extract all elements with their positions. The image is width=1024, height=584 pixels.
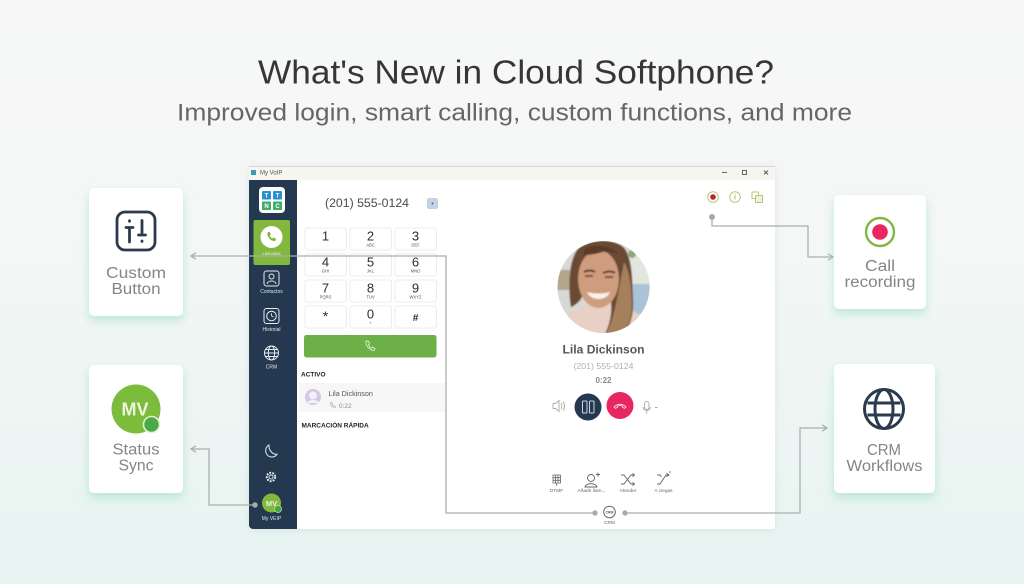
icon: moon: [266, 445, 277, 457]
CRM tab: [604, 506, 615, 526]
icon: globe: [864, 390, 904, 428]
caller photo: [557, 240, 651, 334]
dial pad: 3: [412, 228, 419, 244]
dial pad: #: [413, 313, 419, 324]
dial pad: 4: [322, 254, 329, 270]
label line 2: Sync: [118, 458, 154, 474]
panel: softphone app window: [249, 166, 775, 529]
active call row: [299, 383, 445, 412]
label: Call: [865, 258, 895, 275]
nav: contacts: Contactos: [260, 289, 283, 295]
label: Status: [112, 442, 160, 458]
nav: CRM: [264, 346, 278, 370]
label: Custom: [106, 265, 166, 282]
nav: history: Historial: [262, 327, 281, 333]
dial pad: 2: [367, 228, 374, 244]
nav: history: [262, 308, 281, 333]
panel: call recording: [834, 195, 926, 309]
phone number display: (201) 555-0124: [325, 198, 410, 210]
logo: N: [264, 204, 269, 210]
label line 2: Button: [112, 281, 160, 298]
dial pad: 1: [322, 228, 329, 244]
dial pad: GHI: [322, 268, 329, 274]
call controls: [553, 392, 658, 420]
dial pad: 9: [412, 280, 419, 296]
caller details: [562, 342, 644, 385]
arrow: record icon to call recording: [709, 214, 833, 257]
label: CRM: [867, 442, 901, 459]
tool: DTMF: DTMF: [550, 488, 563, 494]
in-call tools: [550, 471, 673, 494]
my account avatar: MV: [266, 499, 277, 508]
dial pad: JKL: [367, 268, 375, 274]
tool: attended transfer: Atender: [620, 488, 637, 494]
icon: settings gear: [267, 473, 275, 481]
tool: add call: Añadir llam...: [578, 488, 606, 494]
CRM tab: CRM: [606, 510, 614, 514]
dial pad: +: [369, 320, 372, 326]
arrow: dial pad to custom button: [191, 256, 598, 516]
dial pad: 7: [322, 280, 329, 296]
arrow: account to status sync: [191, 449, 258, 508]
logo: C: [275, 204, 280, 210]
dial pad: WXYZ: [409, 294, 422, 300]
caller details: Lila Dickinson: [562, 342, 644, 356]
logo: [259, 187, 285, 213]
logo: T: [265, 194, 269, 200]
dial pad: 0: [367, 306, 374, 322]
dial pad: 6: [412, 254, 419, 270]
tool: blind transfer: A ciegas: [654, 488, 673, 494]
title: What's New in Cloud Softphone?: [258, 54, 774, 90]
subtitle: Improved login, smart calling, custom functions, and more: [177, 100, 852, 126]
dial pad: TUV: [366, 294, 375, 300]
panel: status sync: [89, 365, 183, 493]
dial pad: ABC: [366, 242, 375, 248]
nav: calls active: Llamadas: [262, 251, 281, 256]
dial pad: [305, 228, 436, 328]
speed dial heading: MARCACIÓN RÁPIDA: [302, 420, 369, 430]
caller details: 0:22: [595, 376, 612, 385]
active call row: Lila Dickinson: [328, 389, 373, 398]
icon: record: [866, 218, 894, 246]
dial pad: 8: [367, 280, 374, 296]
call button: [304, 335, 436, 358]
nav: calls active: [254, 220, 290, 265]
my account avatar: My VEIP: [262, 516, 282, 522]
panel: CRM workflows: [834, 364, 935, 493]
logo: T: [276, 194, 280, 200]
arrow: CRM tab to CRM workflows: [622, 428, 827, 516]
dial pad: PQRS: [320, 294, 332, 300]
nav: contacts: [260, 271, 283, 295]
label line 2: Workflows: [846, 458, 923, 475]
dial pad: *: [323, 308, 329, 324]
dial pad: MNO: [411, 268, 421, 274]
icon: MV avatar: MV: [122, 400, 148, 420]
window title bar: My VoIP: [260, 170, 282, 176]
CRM tab: CRM: [604, 520, 615, 526]
active call row: 0:22: [339, 403, 352, 410]
label line 2: recording: [844, 274, 916, 291]
top-right tool icons: [708, 192, 762, 202]
active calls heading: ACTIVO: [301, 372, 326, 378]
caller details: (201) 555-0124: [574, 362, 634, 371]
my account avatar: [262, 494, 282, 522]
icon: sliders: [117, 212, 155, 250]
nav: CRM: CRM: [266, 364, 277, 370]
sidebar: [249, 180, 297, 529]
phone number display: [325, 198, 438, 210]
dial pad: DEF: [411, 242, 420, 248]
dial pad: 5: [367, 254, 374, 270]
window title bar: [249, 166, 775, 180]
panel: custom button: [89, 188, 183, 316]
